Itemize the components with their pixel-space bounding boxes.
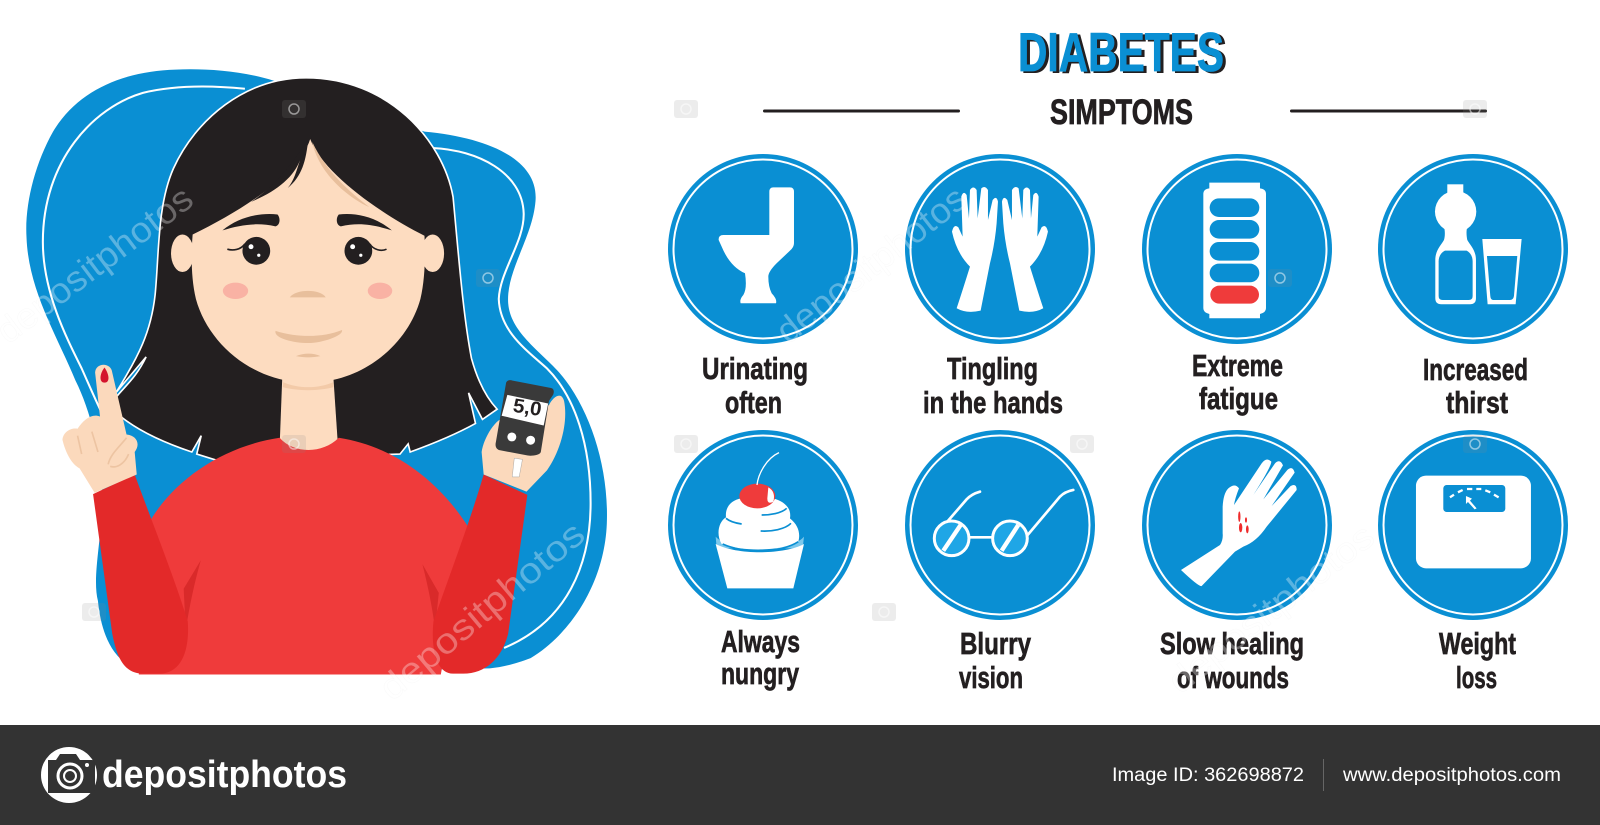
- forehead shadow: [312, 142, 369, 207]
- ear right: [421, 234, 444, 272]
- icon: low battery: [1203, 183, 1266, 318]
- label: [721, 624, 800, 691]
- label: [959, 626, 1032, 695]
- symptom: always hungry: [668, 430, 858, 691]
- watermarks: depositphotos: [371, 513, 592, 708]
- icon: glasses: [934, 490, 1073, 556]
- white outline inside blob: [43, 86, 591, 648]
- right hand: [482, 396, 565, 492]
- label: thirst: [1446, 385, 1508, 420]
- label: [923, 351, 1063, 420]
- label: Always: [721, 624, 800, 659]
- label: in the hands: [923, 385, 1063, 420]
- label: [1160, 626, 1304, 695]
- left hand: [62, 365, 138, 493]
- icon: bathroom scale: [1416, 476, 1531, 568]
- left sleeve: [93, 474, 188, 674]
- logo wordmark: depositphotos: [102, 754, 347, 796]
- sweater folds: [184, 560, 439, 630]
- label: Weight: [1439, 626, 1516, 661]
- red nail: [101, 368, 108, 383]
- eyebrows: [222, 214, 392, 230]
- label: fatigue: [1199, 381, 1278, 416]
- label: [1192, 348, 1283, 416]
- label: [702, 351, 808, 420]
- symptom: urinating often: [668, 154, 858, 420]
- subtitle: SIMPTOMS with rules: [763, 93, 1487, 132]
- subtitle: SIMPTOMS with rules: SIMPTOMS: [1050, 93, 1193, 132]
- footer bar: [0, 725, 1600, 825]
- hair: [116, 78, 497, 460]
- hair strands: [251, 140, 308, 202]
- symptom: slow healing of wounds: [1142, 430, 1332, 695]
- icon: cupcake: [716, 453, 804, 588]
- label: [1423, 352, 1528, 420]
- title: DIABETES: DIABETES: [1018, 21, 1224, 83]
- neck: [279, 372, 339, 458]
- eyes: [227, 237, 387, 265]
- icon: toilet: [719, 187, 794, 303]
- face: [192, 139, 425, 383]
- label: of wounds: [1177, 660, 1289, 695]
- nose, mouth and chin: [275, 291, 342, 357]
- cheeks: [223, 283, 392, 299]
- symptom: increased thirst: [1378, 154, 1568, 420]
- label: loss: [1456, 660, 1497, 695]
- logo mark: [41, 747, 97, 803]
- right sleeve: [433, 474, 527, 674]
- watermarks: [0, 100, 1487, 708]
- glucose meter: 5,0: [511, 395, 543, 421]
- divider: [1323, 759, 1324, 791]
- label: Slow healing: [1160, 626, 1304, 661]
- label: Increased: [1423, 352, 1528, 387]
- label: vision: [959, 660, 1023, 695]
- symptom: extreme fatigue: [1142, 154, 1332, 416]
- label: often: [725, 385, 782, 420]
- neck shadow: [283, 382, 333, 390]
- illustration: woman with glucose meter: [26, 69, 607, 674]
- glucose meter: [496, 380, 554, 477]
- label: nungry: [721, 656, 800, 691]
- label: Urinating: [702, 351, 808, 386]
- blue background blob: [26, 69, 607, 674]
- icon: hands: [952, 187, 1048, 312]
- sweater body: [139, 438, 467, 674]
- label: Extreme: [1192, 348, 1283, 383]
- watermarks: depositphotos: [768, 177, 974, 351]
- label: Tingling: [947, 351, 1038, 386]
- label: [1439, 626, 1516, 695]
- image id: Image ID: 362698872: [1112, 765, 1304, 786]
- symptom: blurry vision: [905, 430, 1095, 695]
- ear left: [171, 234, 194, 272]
- symptom: weight loss: [1378, 430, 1568, 695]
- title: DIABETES: DIABETES: [1021, 22, 1227, 84]
- label: Blurry: [960, 626, 1032, 661]
- watermarks: depositphotos: [1160, 515, 1382, 701]
- icon: bottle and glass: [1435, 184, 1522, 304]
- icon: wounded hand: [1181, 460, 1297, 586]
- symptom: tingling in the hands: [905, 154, 1095, 420]
- site url: www.depositphotos.com: [1342, 765, 1561, 786]
